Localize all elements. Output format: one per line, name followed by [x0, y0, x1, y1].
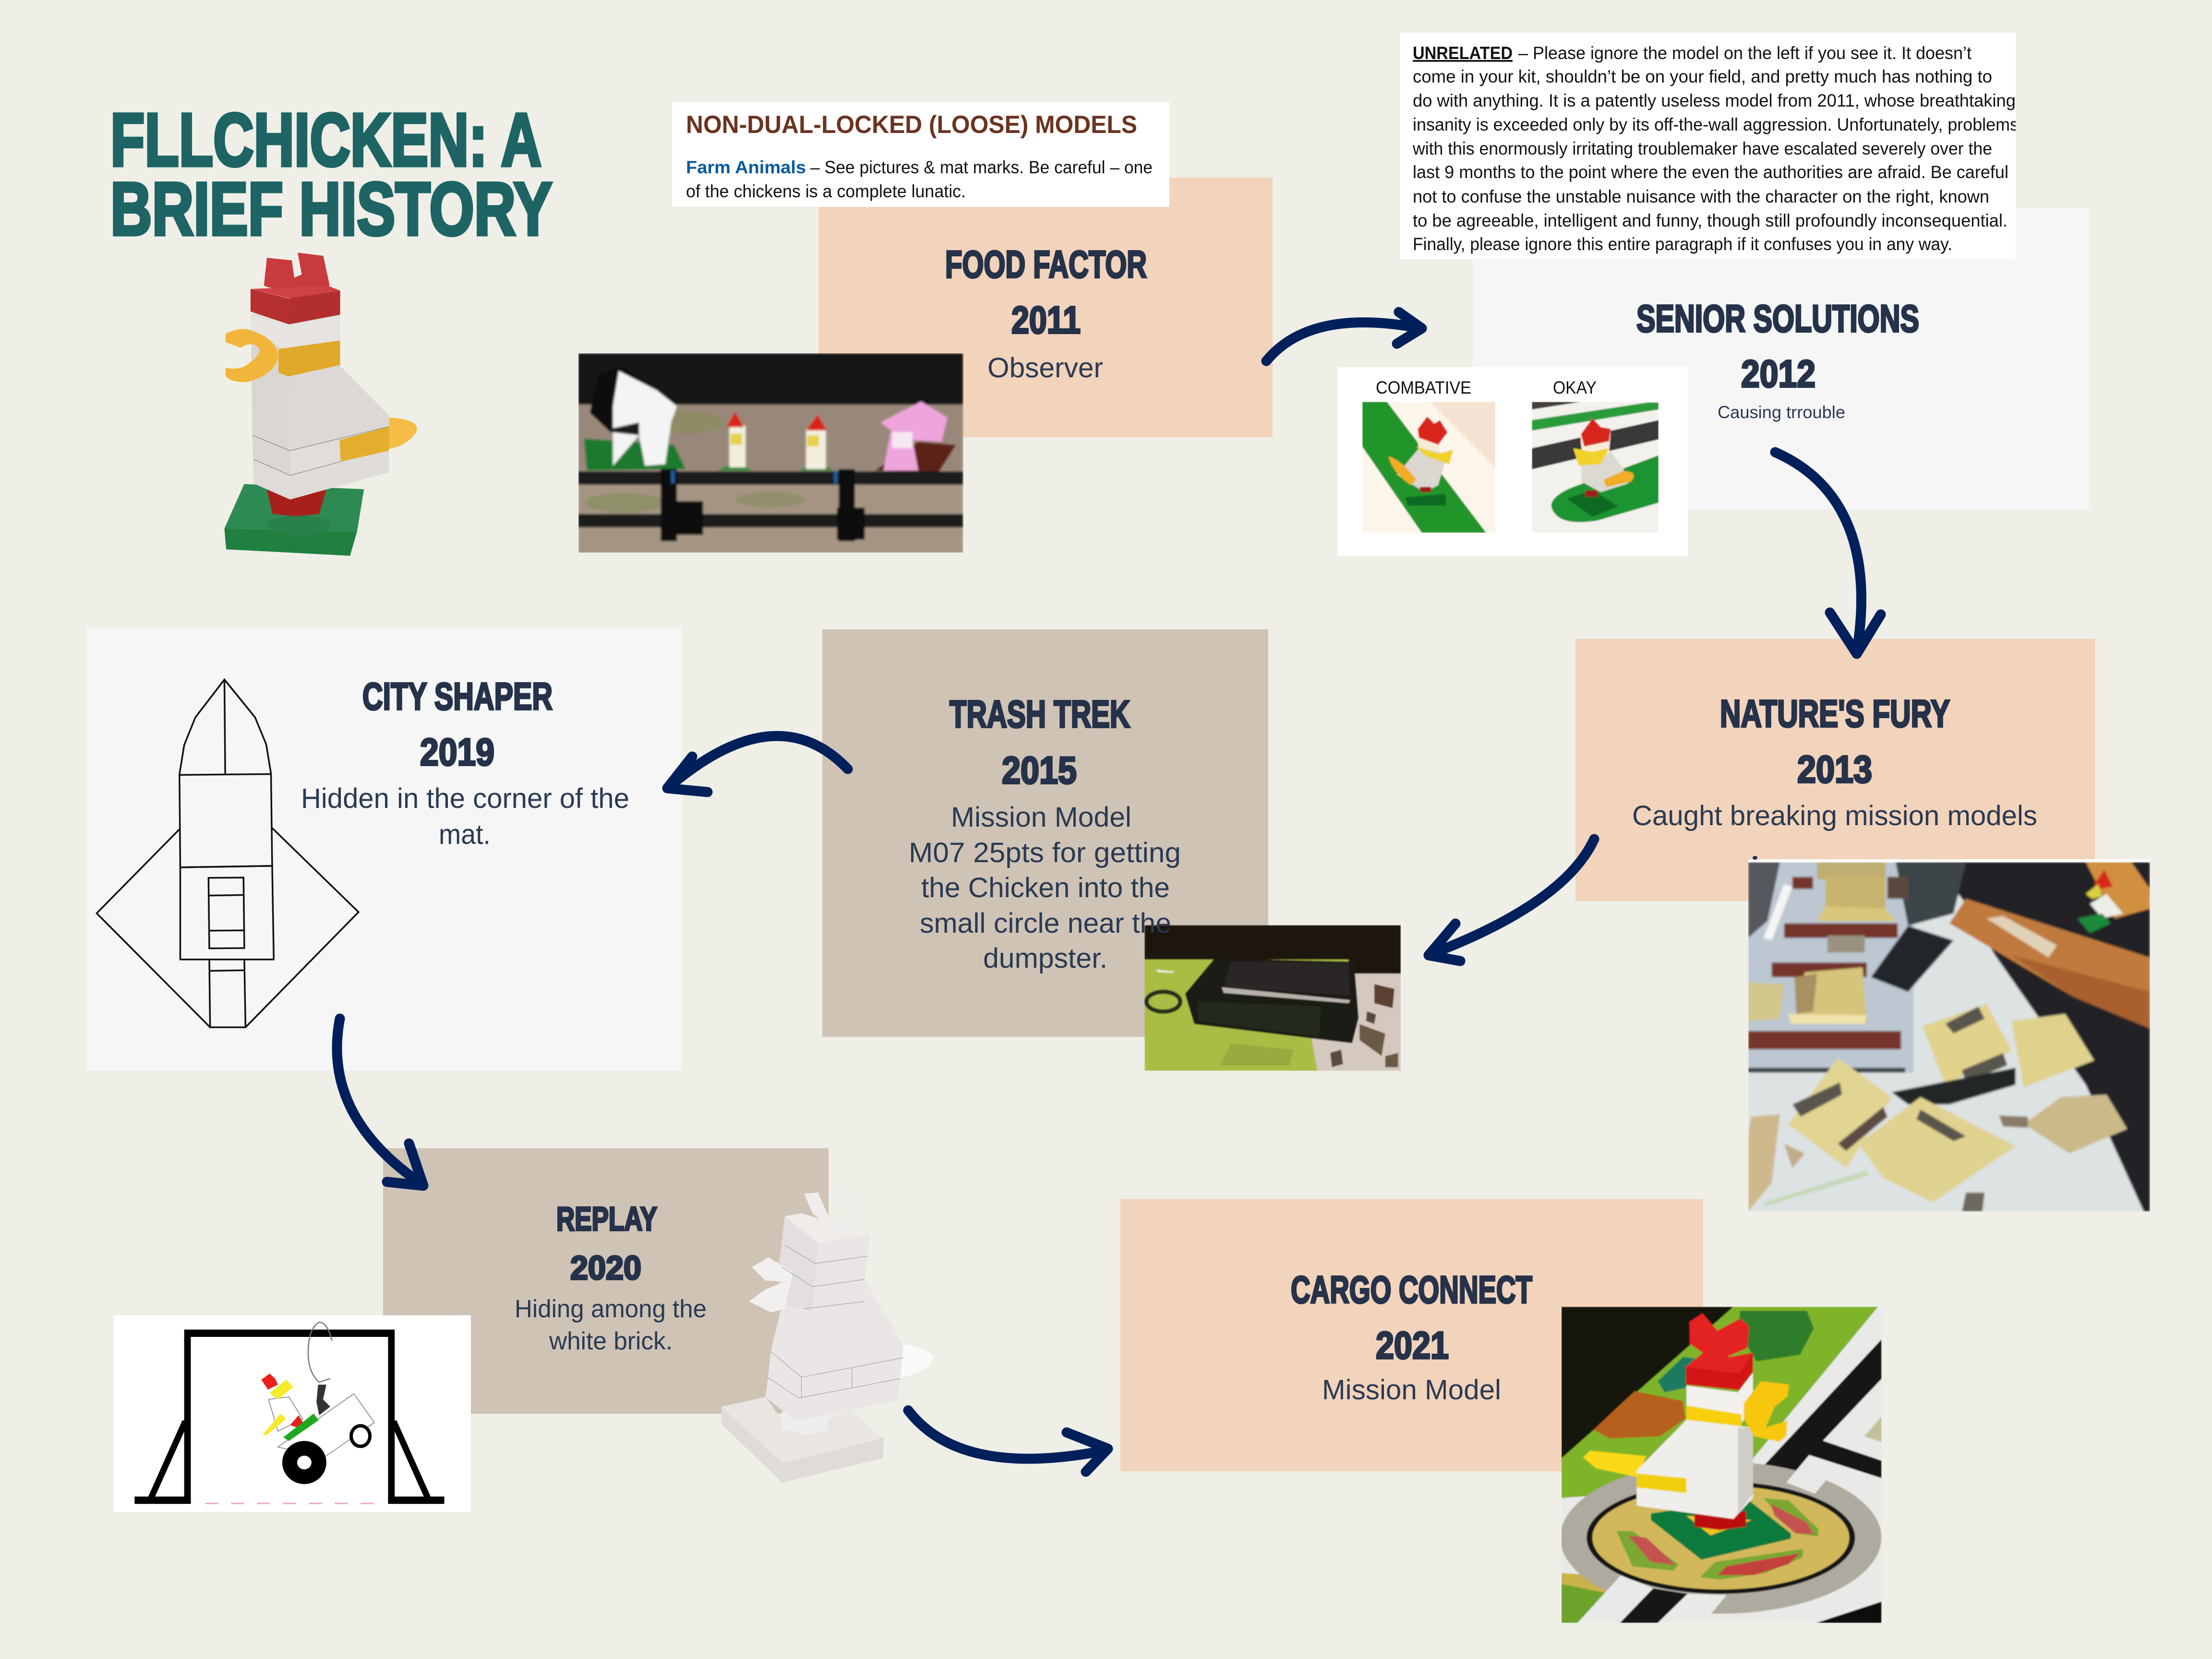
note: unrelated paragraph: – Please ignore the model on the left if you see it. It doesn’t — [1518, 43, 1972, 63]
heading: senior solutions: SENIOR SOLUTIONS — [1636, 297, 1919, 340]
photo: combative chicken — [1362, 402, 1495, 533]
arrow: senior solutions to nature's fury — [1775, 452, 1881, 654]
panel: food factor 2011 — [818, 178, 1273, 437]
panel: combative and okay photos — [1338, 367, 1688, 556]
description: mission model: dumpster. — [983, 943, 1107, 974]
year: 2012: 2012 — [1741, 352, 1815, 395]
icon: red and yellow LEGO chicken — [224, 252, 417, 556]
note: unrelated paragraph: last 9 months to the point where the even the authorities are afraid. Be careful — [1413, 162, 2008, 182]
note: non-dual-locked models — [672, 102, 1169, 207]
note: unrelated paragraph — [1400, 33, 2019, 259]
caption: caught breaking mission models: Caught breaking mission models — [1632, 800, 2037, 831]
description: mission model — [909, 802, 1181, 974]
arrow: city shaper to replay — [337, 1019, 423, 1186]
title: BRIEF HISTORY — [110, 168, 552, 251]
panel: cargo connect 2021 — [1120, 1199, 1703, 1471]
caption: hidden in the corner: mat. — [439, 819, 491, 850]
note: unrelated paragraph: Finally, please ignore this entire paragraph if it confuses you in any way. — [1413, 234, 1952, 254]
heading: trash trek: TRASH TREK — [950, 693, 1130, 735]
arrow: nature's fury to trash trek — [1429, 839, 1594, 961]
year: 2013: 2013 — [1797, 748, 1872, 791]
heading: nature's fury: NATURE'S FURY — [1720, 692, 1950, 735]
year: 2015: 2015 — [1002, 749, 1077, 792]
note: unrelated paragraph: insanity is exceeded only by its off-the-wall aggression. Unfortunately, problems — [1413, 115, 2019, 134]
description: mission model: the Chicken into the — [921, 872, 1170, 903]
arrow: food factor to senior solutions — [1266, 312, 1422, 361]
note: non-dual-locked models: NON-DUAL-LOCKED (LOOSE) MODELS — [686, 111, 1137, 139]
drawing: car on hook under frame — [114, 1315, 471, 1512]
caption: hiding among the white brick: white brick. — [549, 1327, 673, 1355]
year: 2020: 2020 — [570, 1249, 641, 1286]
panel: city shaper 2019 — [86, 627, 682, 1071]
heading: city shaper: CITY SHAPER — [362, 675, 553, 718]
panel: replay 2020 — [383, 1148, 829, 1414]
note: unrelated paragraph: do with anything. It is a patently useless model from 2011, whose breathtaking — [1413, 91, 2016, 110]
caption: hidden in the corner: Hidden in the corner of the — [301, 783, 629, 814]
caption: causing trouble: Causing trrouble — [1718, 402, 1845, 422]
note: unrelated paragraph: UNRELATED — [1413, 43, 1513, 63]
photo: broken mission models and hammer — [1748, 856, 2150, 1212]
note: unrelated paragraph: not to confuse the unstable nuisance with the character on the right, known — [1413, 187, 1989, 206]
title — [110, 98, 552, 251]
description: mission model: M07 25pts for getting — [909, 837, 1181, 868]
year: 2021: 2021 — [1376, 1324, 1449, 1367]
caption: mission model: Mission Model — [1322, 1374, 1501, 1406]
year: 2011: 2011 — [1011, 299, 1081, 341]
photo: LEGO chicken on challenge mat — [1560, 1307, 1881, 1623]
year: 2019: 2019 — [420, 731, 494, 773]
text: trash trek 2015 — [909, 693, 1181, 974]
arrow: trash trek to city shaper — [667, 736, 848, 792]
heading: cargo connect: CARGO CONNECT — [1291, 1268, 1532, 1311]
photo: okay chicken — [1532, 402, 1659, 533]
photo: dumpster on mat — [1144, 925, 1401, 1071]
arrow: replay to cargo connect — [908, 1410, 1108, 1472]
caption: hidden in the corner — [301, 783, 629, 850]
title: FLLCHICKEN: A — [110, 98, 541, 182]
panel: nature's fury 2013 — [1575, 639, 2095, 901]
note: non-dual-locked models: of the chickens is a complete lunatic. — [686, 181, 966, 201]
caption: hiding among the white brick: Hiding among the — [515, 1295, 707, 1323]
label: combative: COMBATIVE — [1376, 378, 1471, 397]
photo: farm animal models — [578, 353, 963, 554]
caption: observer: Observer — [987, 352, 1103, 384]
label: okay: OKAY — [1553, 378, 1597, 397]
panel: trash trek 2015 background — [822, 629, 1268, 1037]
icon: rocket line drawing — [96, 680, 359, 1027]
heading: food factor: FOOD FACTOR — [945, 243, 1147, 286]
caption: hiding among the white brick — [515, 1295, 707, 1355]
description: mission model: Mission Model — [951, 802, 1131, 833]
note: non-dual-locked models: Farm Animals — [686, 157, 806, 177]
panel: senior solutions 2012 — [1473, 208, 2089, 509]
note: unrelated paragraph: with this enormously irritating troublemaker have escalated severely over the — [1412, 139, 1992, 158]
heading: replay: REPLAY — [556, 1200, 657, 1238]
description: mission model: small circle near the — [920, 908, 1171, 939]
icon: white LEGO chicken — [721, 1189, 934, 1482]
note: unrelated paragraph: to be agreeable, intelligent and funny, though still profoundly inconsequential. — [1413, 211, 2008, 230]
mark: small dark dot above photo — [1753, 856, 1757, 860]
note: unrelated paragraph: come in your kit, shouldn’t be on your field, and pretty much has nothing to — [1413, 67, 1992, 86]
note: non-dual-locked models: – See pictures & mat marks. Be careful – one — [810, 157, 1153, 177]
